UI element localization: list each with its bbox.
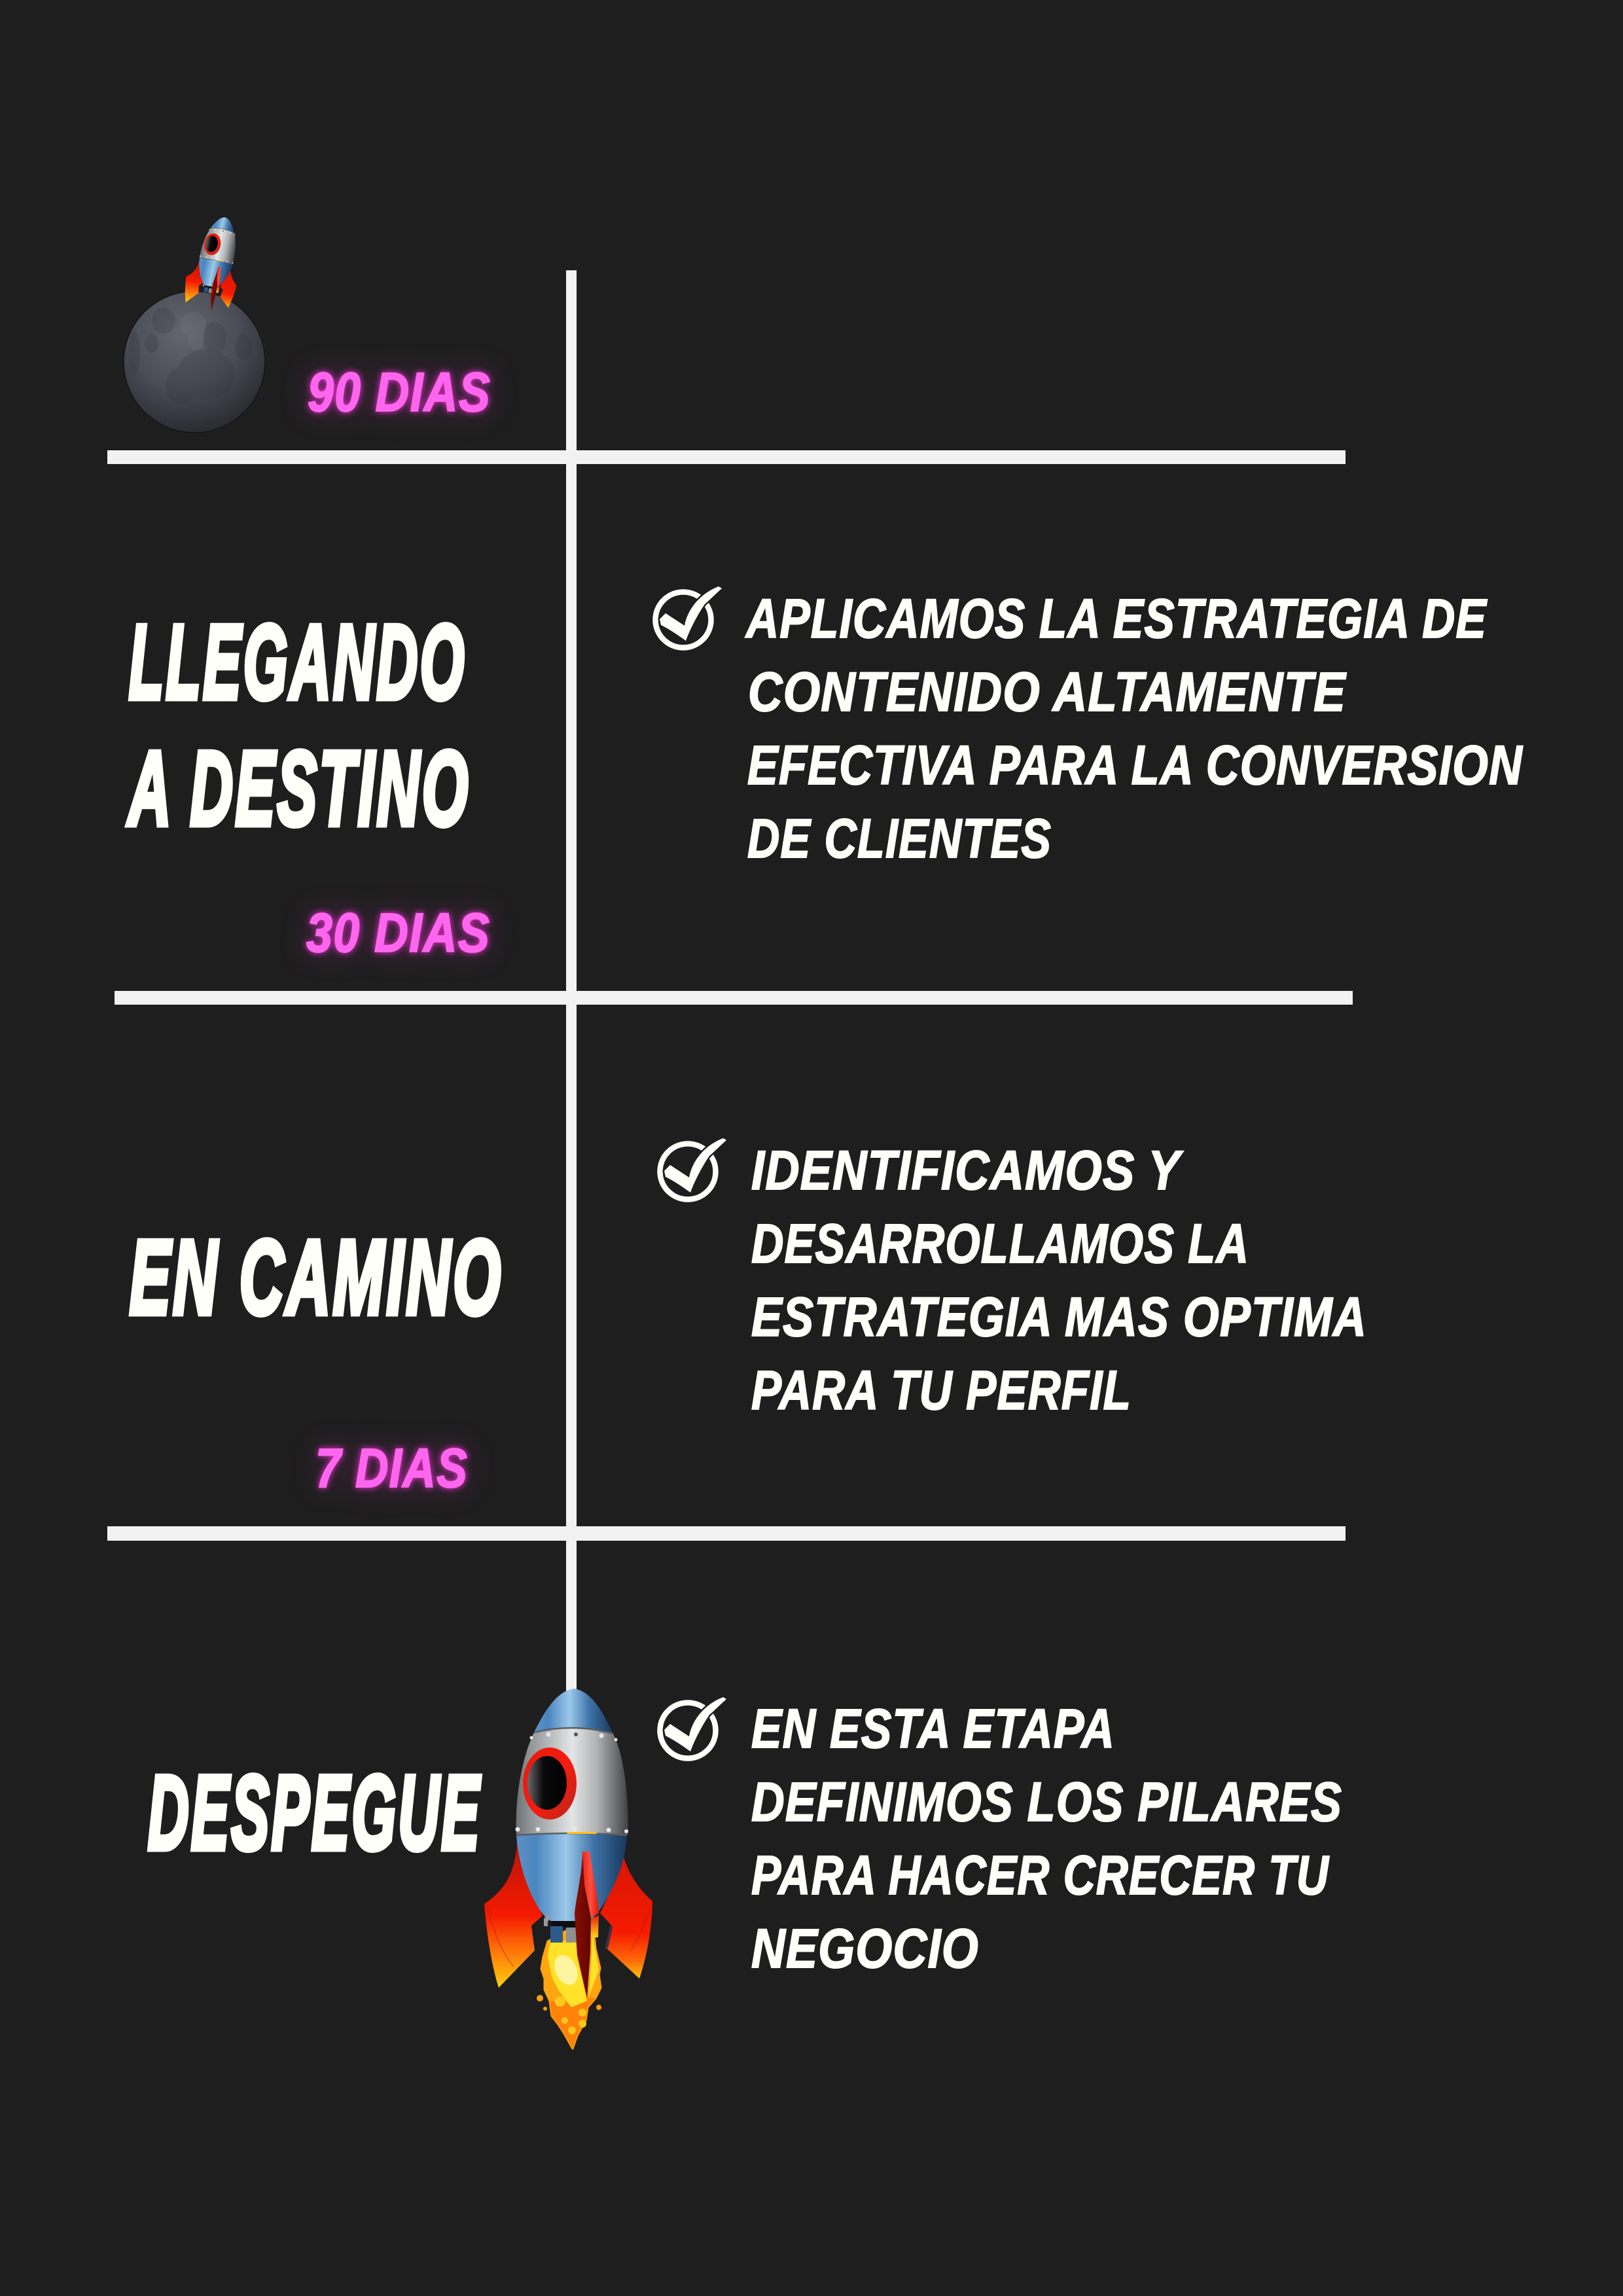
text block: aplicamos: DE CLIENTES <box>747 808 1052 869</box>
heading: llegando a destino <box>127 603 471 848</box>
heading: en camino: EN CAMINO <box>130 1219 503 1336</box>
horizontal divider: 7 dias <box>107 1526 1346 1541</box>
icon: large rocket with flame <box>484 1689 652 2049</box>
horizontal divider: 90 dias <box>107 450 1346 464</box>
text block: identificamos <box>751 1139 1367 1421</box>
text block: aplicamos: CONTENIDO ALTAMENTE <box>748 661 1347 723</box>
icon: small rocket on moon <box>181 212 249 314</box>
text block: aplicamos: APLICAMOS LA ESTRATEGIA DE <box>745 588 1488 649</box>
horizontal divider: 30 dias <box>115 991 1353 1005</box>
text block: en esta etapa: EN ESTA ETAPA <box>751 1698 1115 1759</box>
icon: check 3 <box>660 1697 726 1758</box>
label: 30 dias: 30 DIAS <box>306 902 490 963</box>
icon: check 2 <box>660 1138 726 1199</box>
label: 7 dias: 7 DIAS <box>315 1437 468 1499</box>
text block: en esta etapa: PARA HACER CRECER TU <box>751 1844 1330 1906</box>
icon: check 1 <box>656 586 722 648</box>
heading: llegando a destino: LLEGANDO <box>129 603 467 721</box>
text block: identificamos: PARA TU PERFIL <box>751 1359 1132 1421</box>
vertical timeline axis <box>566 270 577 1697</box>
text block: identificamos: DESARROLLAMOS LA <box>751 1213 1249 1274</box>
heading: llegando a destino: A DESTINO <box>127 730 471 848</box>
text block: en esta etapa: NEGOCIO <box>751 1918 979 1979</box>
heading: despegue: DESPEGUE <box>148 1754 482 1872</box>
label: 90 dias: 90 DIAS <box>308 361 491 423</box>
text block: identificamos: IDENTIFICAMOS Y <box>751 1139 1184 1201</box>
text block: identificamos: ESTRATEGIA MAS OPTIMA <box>751 1286 1367 1348</box>
icon: moon <box>124 291 265 433</box>
text block: en esta etapa: DEFINIMOS LOS PILARES <box>751 1771 1342 1833</box>
text block: en esta etapa <box>751 1698 1342 1979</box>
text block: aplicamos <box>745 588 1524 869</box>
